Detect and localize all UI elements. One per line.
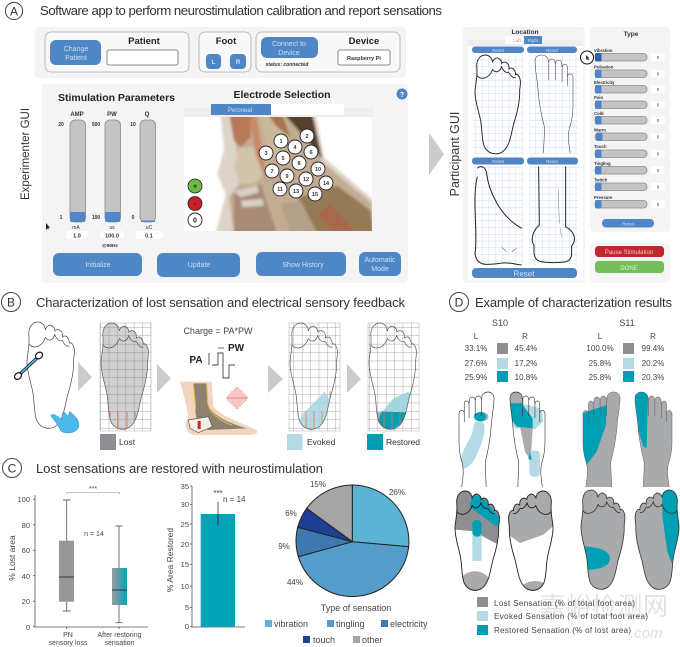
action buttons: Mode (371, 266, 389, 273)
category labels (49, 632, 142, 647)
sliders: Pressure (594, 195, 613, 200)
electrodes 1 to 15: 10 (315, 167, 321, 173)
stats table S10 and S11: S10 (492, 318, 508, 328)
stats table S10 and S11: S11 (619, 318, 635, 328)
bar chart: percent area restored (165, 482, 246, 631)
panel: pause and done: DONE (620, 266, 638, 272)
sliders: AMP PW Q: us (109, 225, 115, 231)
box plot: percent lost area: 20 (22, 597, 30, 606)
slider values: 0 (657, 102, 660, 108)
dorsal foot S10 L (459, 392, 494, 487)
cursor icon (46, 223, 50, 230)
label: Experimenter GUI: Experimenter GUI (20, 108, 32, 200)
significance and sample size (213, 489, 246, 504)
pie labels: 44% (287, 578, 303, 587)
polarity buttons: 0 (193, 218, 197, 224)
panel B heading: Characterization of lost sensation and electrical sensory feedback (36, 295, 406, 310)
sliders: AMP PW Q: 100.0 (105, 234, 119, 240)
panel: sensation type (580, 27, 670, 232)
help icon (396, 88, 408, 100)
stats table S10 and S11: 100.0% (586, 344, 614, 353)
sliders: Electricity (594, 80, 615, 85)
sliders: Touch (594, 144, 607, 149)
grid foot: evoked (289, 323, 340, 432)
polarity buttons (188, 179, 202, 227)
stats table S10 and S11: L (598, 332, 603, 341)
charge diagram: PW (228, 343, 245, 354)
foot grids: Reset (492, 48, 505, 53)
box plot: percent lost area: 60 (22, 546, 30, 555)
foot sketches (475, 55, 574, 265)
pie labels: 26% (389, 488, 405, 497)
category labels: sensory loss (49, 640, 88, 647)
foot with swab and touch (13, 322, 79, 433)
slider values: 0 (657, 87, 660, 92)
slider values: 0 (657, 134, 660, 140)
legend: lost: Lost (119, 437, 136, 447)
panel: pause and done: Pause Stimulation (605, 250, 653, 256)
icon: vibration wave (226, 387, 248, 409)
action buttons: Automatic (364, 257, 396, 264)
legend: lost (100, 434, 136, 450)
dorsal foot S11 R (635, 390, 672, 487)
sliders: AMP PW Q: uC (146, 225, 153, 231)
bar chart: percent area restored: 15 (181, 560, 189, 569)
electrode tab: Peroneal (228, 108, 252, 114)
sliders: AMP PW Q: 10 (130, 122, 136, 128)
pie labels: 15% (310, 480, 326, 489)
arrow to participant GUI (429, 133, 444, 175)
panel: experimenter GUI top bar: Device (278, 50, 300, 57)
stats table S10 and S11: 27.6% (465, 359, 487, 368)
pie title: Type of sensation (321, 603, 391, 613)
panel C heading: C (8, 462, 17, 476)
electrodes 1 to 15: 13 (293, 189, 299, 195)
legend: panel D: Restored Sensation (% of lost area) (494, 626, 631, 635)
significance and sample size: *** (213, 489, 223, 498)
pie legend: other (362, 635, 383, 645)
panel: experimenter GUI top bar: R (236, 60, 241, 66)
legend: restored (367, 434, 420, 450)
box: after restoring sensation (112, 526, 127, 623)
electrodes 1 to 15: 7 (270, 169, 274, 175)
plantar foot S11 R (635, 488, 680, 589)
sliders: AMP PW Q: 0.1 (145, 234, 153, 240)
panel: experimenter GUI top bar: status: connected (266, 62, 309, 68)
bar chart: percent area restored: 10 (181, 582, 189, 591)
sliders: AMP PW Q: 1 (60, 215, 63, 221)
stats table S10 and S11: 25.8% (589, 373, 611, 382)
axis title: % Area Restored (165, 528, 175, 592)
box plot: percent lost area: 40 (22, 572, 30, 581)
box plot: percent lost area: 0 (26, 623, 30, 632)
bar chart: percent area restored: 5 (185, 603, 189, 612)
panel: sensation type: Reset (622, 222, 635, 226)
sliders: AMP PW Q: 0 (132, 215, 135, 221)
sliders: Vibration (594, 48, 613, 53)
action buttons: Show History (282, 262, 324, 269)
electrodes 1 to 15: 6 (309, 150, 313, 156)
panel D heading: D (455, 296, 464, 310)
cursor highlight (580, 51, 594, 64)
stats table S10 and S11: R (522, 332, 528, 341)
stats table S10 and S11: 25.9% (465, 373, 487, 382)
panel: experimenter GUI top bar: Patient (65, 55, 87, 62)
significance bracket (67, 486, 120, 494)
slider values: 0 (657, 184, 660, 190)
electrodes 1 to 15: 4 (293, 145, 297, 151)
electrodes 1 to 15: 1 (279, 139, 283, 145)
sliders: AMP PW Q: 100 (92, 215, 100, 221)
stats table S10 and S11: 17.2% (515, 359, 537, 368)
bar chart: percent area restored: 20 (181, 540, 189, 549)
heading: stimulation parameters: Stimulation Parameters (58, 92, 175, 104)
electrodes 1 to 15: 9 (285, 174, 289, 180)
panel: experimenter GUI top bar: L (212, 60, 216, 66)
watermark: 嘉峪检测网 (540, 593, 668, 621)
category labels: PN (63, 632, 73, 639)
grid foot: lost (100, 323, 151, 431)
panel: pause and done (590, 243, 670, 283)
slider values: 0 (657, 202, 660, 207)
panel D heading (450, 292, 672, 312)
pie legend: vibration (274, 619, 308, 629)
stats table S10 and S11: R (650, 332, 656, 341)
slider values: 0 (657, 168, 660, 173)
charge diagram (183, 326, 253, 378)
panel: experimenter GUI top bar: Patient (128, 36, 161, 47)
slider values: 0 (657, 55, 660, 60)
pie labels: 6% (285, 509, 297, 518)
panel A heading: A (10, 4, 18, 18)
pie legend: touch (313, 635, 335, 645)
stats table S10 and S11: 10.8% (515, 373, 537, 382)
panel: experimenter GUI main (42, 84, 408, 283)
help icon: ? (400, 92, 404, 99)
significance and sample size: n = 14 (223, 495, 246, 504)
sliders: AMP PW Q: AMP (70, 112, 84, 118)
legend: panel D: Lost Sensation (% of total foot area) (494, 599, 635, 608)
plantar foot S11 L (581, 490, 625, 589)
reset button (602, 219, 654, 228)
pie chart: type of sensation (296, 485, 409, 596)
legend: panel D: Evoked Sensation (% of total foot area) (494, 612, 648, 621)
stats table S10 and S11: 20.2% (642, 359, 664, 368)
electrodes 1 to 15: 14 (323, 181, 330, 187)
slider values: 0 (657, 118, 660, 123)
panel: experimenter GUI top bar: Device (349, 36, 379, 47)
icon: cotton swab (13, 351, 44, 381)
stats table S10 and S11: 20.3% (642, 373, 664, 382)
sliders: AMP PW Q: 500 (92, 122, 100, 128)
box: PN sensory loss (59, 500, 74, 611)
sliders: Tingling (594, 161, 611, 166)
electrodes 1 to 15 (259, 129, 333, 201)
electrodes 1 to 15: 12 (303, 177, 309, 183)
slider values: 0 (657, 152, 660, 156)
panel: experimenter GUI top bar (35, 27, 406, 78)
plantar foot S10 R (508, 490, 554, 591)
box plot: percent lost area: 80 (22, 521, 30, 530)
stats table S10 and S11: L (474, 332, 479, 341)
panel A heading: Software app to perform neurostimulation calibration and report sensations (40, 3, 442, 18)
legend: evoked: Evoked (307, 437, 336, 447)
foot anatomy illustration (180, 382, 257, 435)
electrodes 1 to 15: 2 (305, 134, 309, 140)
panel: experimenter GUI top bar: Connect to (272, 41, 306, 48)
panel: sensation type: Type (624, 31, 639, 38)
panel: location: Reset (514, 270, 535, 278)
stats table S10 and S11: 45.4% (515, 344, 537, 353)
stats table S10 and S11: 25.8% (589, 359, 611, 368)
sliders: Twitch (594, 178, 608, 182)
flow arrows (78, 362, 361, 393)
panel: location: Right (528, 38, 539, 43)
electrodes 1 to 15: 11 (277, 187, 283, 193)
panel C heading: Lost sensations are restored with neurostimulation (36, 461, 323, 476)
action buttons: Update (188, 262, 210, 269)
panel: experimenter GUI top bar: Raspberry Pi (347, 56, 381, 62)
box plot: percent lost area: 100 (17, 495, 30, 504)
bar (201, 514, 235, 627)
sliders: Pulsation (594, 64, 614, 70)
significance bracket: *** (89, 486, 97, 493)
heading: electrode selection: Electrode Selection (234, 89, 330, 101)
foot grids (472, 46, 578, 265)
panel: experimenter GUI top bar: Change (64, 46, 88, 53)
polarity buttons: - (194, 201, 197, 208)
error bar (217, 502, 219, 526)
grid foot: restored (368, 323, 419, 432)
electrodes 1 to 15: 3 (264, 151, 268, 157)
panel: location: Left (513, 38, 521, 43)
electrodes 1 to 15: 8 (297, 161, 301, 167)
pie legend: electricity (390, 619, 428, 629)
stats table S10 and S11: 99.4% (642, 344, 664, 353)
sliders: Cold (594, 111, 604, 116)
pie labels: 9% (278, 542, 290, 551)
sliders: AMP PW Q: @50Hz (102, 243, 119, 249)
category labels: sensation (105, 640, 135, 647)
sliders: AMP PW Q: Q (145, 112, 150, 118)
panel: location (463, 27, 585, 283)
foot grids: Reset (546, 159, 559, 164)
panel D heading: Example of characterization results (475, 295, 672, 310)
plantar foot S10 L (454, 490, 500, 591)
category labels: After restoring (98, 632, 142, 639)
slider values: 0 (657, 72, 660, 76)
bar chart: percent area restored: 30 (181, 500, 189, 509)
pie labels (278, 480, 405, 587)
electrodes 1 to 15: 5 (281, 156, 285, 162)
anatomy image (184, 108, 374, 234)
sliders: AMP PW Q (58, 112, 163, 249)
watermark: .com (630, 625, 663, 642)
foot grids: Reset (546, 48, 559, 53)
stats table S10 and S11: 33.1% (465, 344, 487, 353)
pie legend (265, 619, 428, 645)
legend: evoked (287, 434, 336, 450)
sliders: AMP PW Q: 1.0 (73, 234, 81, 240)
icon: pointing hand (51, 411, 79, 433)
slider values (651, 54, 665, 208)
electrode tab (211, 104, 344, 115)
sliders: AMP PW Q: PW (107, 112, 117, 118)
charge diagram: PA (189, 355, 203, 366)
reset button (472, 268, 577, 278)
dorsal foot S10 R (508, 390, 545, 487)
label: Participant GUI: Participant GUI (448, 112, 462, 196)
panel B heading: B (7, 296, 15, 310)
polarity buttons: + (193, 184, 197, 190)
stats table S10 and S11 (465, 318, 664, 382)
panel: location: Location (511, 29, 539, 36)
sample size: n = 14 (84, 531, 104, 538)
sliders: Warm (594, 128, 606, 132)
pie legend: tingling (336, 619, 365, 629)
sliders (594, 48, 647, 208)
charge diagram: Charge = PA*PW (183, 326, 253, 336)
sliders: AMP PW Q: 20 (58, 122, 64, 128)
axis title: % Lost area (7, 535, 17, 581)
dorsal foot S11 L (582, 392, 620, 487)
legend: panel D (477, 597, 648, 635)
panel: experimenter GUI top bar: Foot (216, 36, 237, 47)
sliders: AMP PW Q: mA (72, 225, 80, 231)
sliders: Pain (594, 95, 603, 100)
action buttons: Initialize (85, 262, 111, 269)
action buttons (53, 252, 401, 277)
watermark (540, 593, 668, 642)
electrodes 1 to 15: 15 (312, 192, 318, 198)
bar chart: percent area restored: 0 (185, 622, 189, 631)
legend: restored: Restored (386, 437, 420, 447)
box plot: percent lost area (7, 486, 148, 647)
foot grids: Reset (492, 159, 505, 164)
bar chart: percent area restored: 35 (181, 482, 189, 491)
bar chart: percent area restored: 25 (181, 520, 189, 529)
